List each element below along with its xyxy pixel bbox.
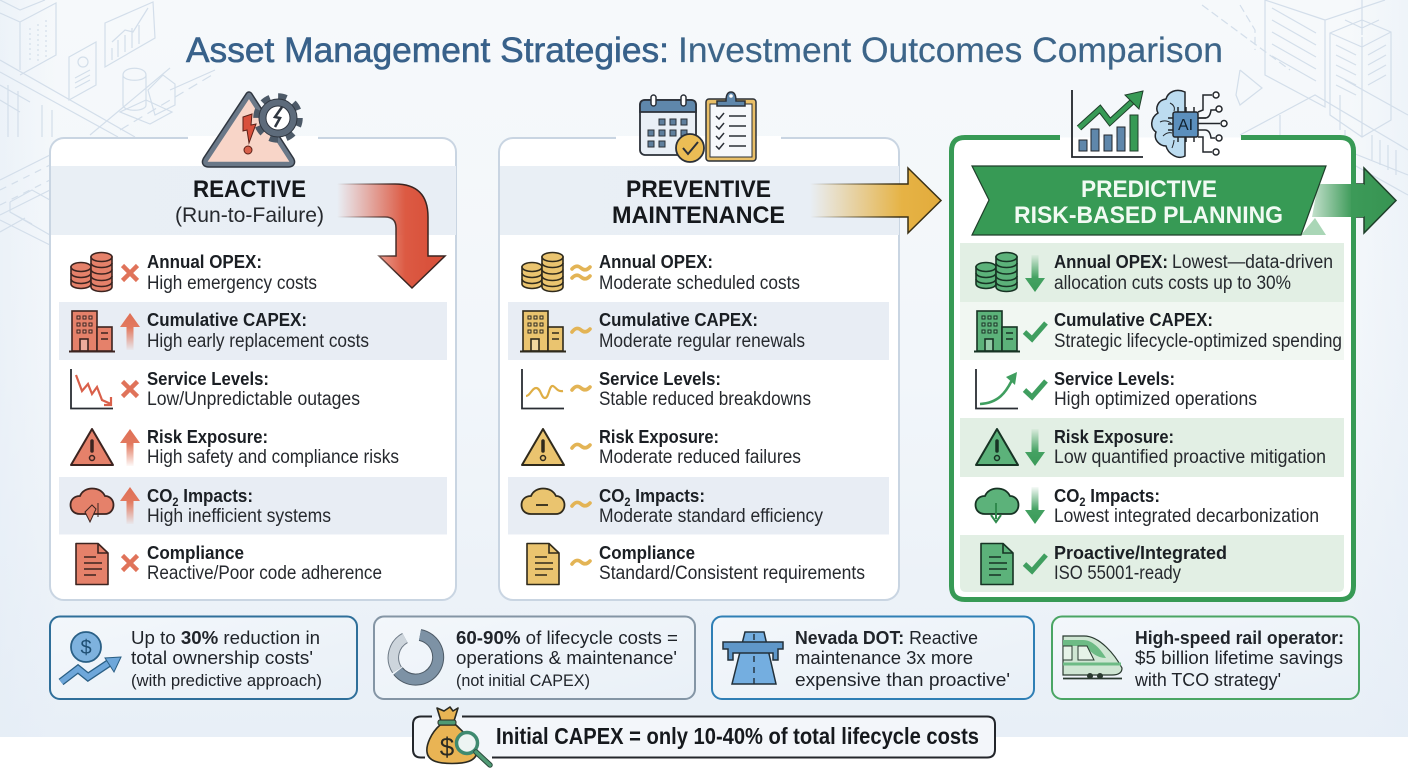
icon: calendar and checklist bbox=[640, 92, 756, 162]
panel card bbox=[499, 138, 899, 600]
row: cumulative capex: High early replacement costs bbox=[147, 331, 369, 352]
heading ribbon: predictive risk-based planning: RISK-BASED PLANNING bbox=[1014, 202, 1283, 229]
text: 60-90% lifecycle costs: (not initial CAPEX) bbox=[456, 671, 590, 690]
text: 30% reduction: total ownership costs' bbox=[131, 647, 313, 668]
stat card: Nevada DOT bbox=[712, 616, 1034, 699]
row: cumulative capex: Strategic lifecycle-optimized spending bbox=[1054, 331, 1342, 352]
stat card: 30% reduction bbox=[50, 616, 357, 699]
heading: reactive: (Run-to-Failure) bbox=[175, 204, 324, 227]
row: risk exposure: Moderate reduced failures bbox=[599, 447, 801, 468]
text: high-speed rail: with TCO strategy' bbox=[1134, 669, 1281, 690]
row: risk exposure: Low quantified proactive mitigation bbox=[1054, 447, 1326, 468]
text: 60-90% lifecycle costs: operations & maintenance' bbox=[456, 647, 677, 668]
arrow: predictive forward bbox=[1300, 168, 1396, 233]
icon: money bag with magnifier bbox=[427, 707, 490, 765]
background line art: left infrastructure bbox=[0, 0, 215, 245]
row: cumulative capex bbox=[520, 309, 805, 352]
row: compliance bbox=[527, 542, 865, 584]
row: risk exposure bbox=[522, 426, 801, 468]
title: Asset Management Strategies: bbox=[186, 31, 669, 70]
text: initial CAPEX: Initial CAPEX = only 10-40% of total lifecycle costs bbox=[496, 723, 979, 749]
icon: warning triangle with broken gear bbox=[205, 95, 300, 164]
row: risk exposure bbox=[976, 426, 1326, 468]
row: co2 impacts: CO bbox=[147, 485, 175, 506]
row: co2 impacts: Impacts: bbox=[179, 485, 253, 506]
header band bbox=[51, 166, 456, 235]
row: cumulative capex: Moderate regular renewals bbox=[599, 331, 805, 352]
row: annual opex: Lowest—data-driven bbox=[1172, 252, 1333, 273]
text: Nevada DOT: Nevada DOT: Reactive bbox=[795, 627, 978, 648]
row: annual opex bbox=[71, 251, 317, 294]
row: cumulative capex bbox=[974, 309, 1342, 352]
stat card: high-speed rail bbox=[1052, 616, 1359, 699]
callout: initial CAPEX bbox=[413, 707, 995, 765]
panel: preventive bbox=[499, 92, 899, 600]
row: cumulative capex: Cumulative CAPEX: bbox=[599, 309, 758, 330]
text: Nevada DOT bbox=[795, 627, 1010, 690]
icon: highway overpass bbox=[723, 632, 783, 684]
heading: reactive bbox=[175, 176, 324, 227]
text: 30% reduction: (with predictive approach) bbox=[131, 671, 322, 690]
text: Nevada DOT: maintenance 3x more bbox=[795, 647, 973, 668]
row: co2 impacts bbox=[976, 485, 1319, 527]
row: annual opex: Moderate scheduled costs bbox=[599, 273, 800, 294]
row: annual opex: allocation cuts costs up to 30% bbox=[1054, 273, 1291, 294]
row: co2 impacts: 2 bbox=[624, 495, 631, 509]
row: service levels: High optimized operations bbox=[1054, 389, 1257, 410]
row: service levels: Stable reduced breakdowns bbox=[599, 389, 811, 410]
header band bbox=[500, 166, 899, 235]
row: risk exposure: Risk Exposure: bbox=[1054, 426, 1174, 447]
row: annual opex: Annual OPEX: bbox=[1054, 251, 1168, 272]
row: co2 impacts: Impacts: bbox=[1086, 485, 1160, 506]
row: service levels: Service Levels: bbox=[147, 368, 269, 389]
row: cumulative capex: Cumulative CAPEX: bbox=[147, 309, 307, 330]
panel: predictive bbox=[952, 90, 1364, 600]
row: co2 impacts: Lowest integrated decarbonization bbox=[1054, 506, 1319, 527]
stat card: 60-90% lifecycle costs bbox=[374, 616, 695, 699]
row: service levels bbox=[71, 368, 360, 410]
row: risk exposure bbox=[71, 426, 399, 468]
row: annual opex: High emergency costs bbox=[147, 273, 317, 294]
row: annual opex bbox=[522, 251, 800, 294]
row: compliance: ISO 55001-ready bbox=[1054, 563, 1181, 584]
row: compliance: Reactive/Poor code adherence bbox=[147, 563, 382, 584]
row: co2 impacts bbox=[70, 485, 331, 527]
text: high-speed rail: $5 billion lifetime savings bbox=[1135, 647, 1343, 668]
arrow: reactive down turn bbox=[337, 184, 445, 288]
text: high-speed rail bbox=[1134, 627, 1344, 690]
heading: reactive: REACTIVE bbox=[193, 176, 306, 203]
icon: high-speed train bbox=[1063, 636, 1122, 679]
icon: dollar coin with rising arrow bbox=[61, 632, 121, 682]
row: co2 impacts: CO bbox=[599, 485, 627, 506]
row: compliance: Standard/Consistent requirements bbox=[599, 563, 865, 584]
row: co2 impacts: 2 bbox=[172, 495, 179, 509]
row: compliance: Compliance bbox=[599, 542, 695, 563]
heading: preventive maintenance bbox=[612, 176, 785, 229]
row: service levels: Service Levels: bbox=[599, 368, 721, 389]
row: co2 impacts: High inefficient systems bbox=[147, 506, 331, 527]
heading: preventive maintenance: MAINTENANCE bbox=[612, 202, 785, 229]
row: service levels: Low/Unpredictable outages bbox=[147, 389, 360, 410]
panel: reactive bbox=[50, 95, 456, 600]
alternating row tints bbox=[59, 302, 447, 534]
text: 60-90% lifecycle costs bbox=[456, 627, 678, 690]
text: Nevada DOT: expensive than proactive' bbox=[795, 669, 1010, 690]
heading ribbon: predictive risk-based planning: PREDICTIVE bbox=[1081, 176, 1217, 203]
row: annual opex bbox=[976, 251, 1333, 294]
row: risk exposure: Risk Exposure: bbox=[599, 426, 719, 447]
icon: growth chart and AI brain bbox=[1072, 90, 1227, 157]
row: co2 impacts: Moderate standard efficiency bbox=[599, 506, 823, 527]
text: 30% reduction: Up to 30% reduction in bbox=[131, 627, 320, 648]
row: compliance bbox=[76, 542, 382, 584]
row: cumulative capex bbox=[69, 309, 369, 352]
icon: donut chart bbox=[393, 635, 438, 680]
text: high-speed rail: High-speed rail operator: bbox=[1135, 627, 1344, 648]
row: annual opex: Annual OPEX: bbox=[599, 251, 713, 272]
background line art: right towers bbox=[1202, 0, 1408, 195]
title: Investment Outcomes Comparison bbox=[678, 31, 1223, 70]
arrow: preventive to predictive bbox=[810, 168, 941, 233]
row: risk exposure: High safety and compliance risks bbox=[147, 447, 399, 468]
panel card bbox=[50, 138, 456, 600]
alternating row tints bbox=[508, 302, 889, 534]
text: 60-90% lifecycle costs: 60-90% of lifecycle costs = bbox=[456, 627, 678, 648]
row: co2 impacts: 2 bbox=[1079, 495, 1086, 509]
title bbox=[186, 31, 1223, 70]
row: service levels bbox=[522, 368, 811, 410]
row: compliance bbox=[981, 542, 1227, 584]
row: service levels bbox=[976, 368, 1257, 410]
row: co2 impacts: Impacts: bbox=[631, 485, 705, 506]
heading ribbon: predictive risk-based planning bbox=[972, 166, 1326, 235]
row: co2 impacts: CO bbox=[1054, 485, 1082, 506]
row: co2 impacts bbox=[522, 485, 823, 527]
row: compliance: Proactive/Integrated bbox=[1054, 542, 1227, 563]
row: service levels: Service Levels: bbox=[1054, 368, 1175, 389]
icon: money bag with magnifier: $ bbox=[440, 732, 455, 762]
panel card bbox=[952, 138, 1354, 600]
row tints bbox=[960, 243, 1344, 592]
row: cumulative capex: Cumulative CAPEX: bbox=[1054, 309, 1213, 330]
row: risk exposure: Risk Exposure: bbox=[147, 426, 268, 447]
icon: dollar coin with rising arrow: $ bbox=[80, 637, 92, 659]
text: 30% reduction bbox=[131, 627, 322, 690]
icon: growth chart and AI brain: AI bbox=[1178, 117, 1193, 134]
row: compliance: Compliance bbox=[147, 542, 244, 563]
row: annual opex: Annual OPEX: bbox=[147, 251, 262, 272]
heading: preventive maintenance: PREVENTIVE bbox=[626, 176, 771, 203]
